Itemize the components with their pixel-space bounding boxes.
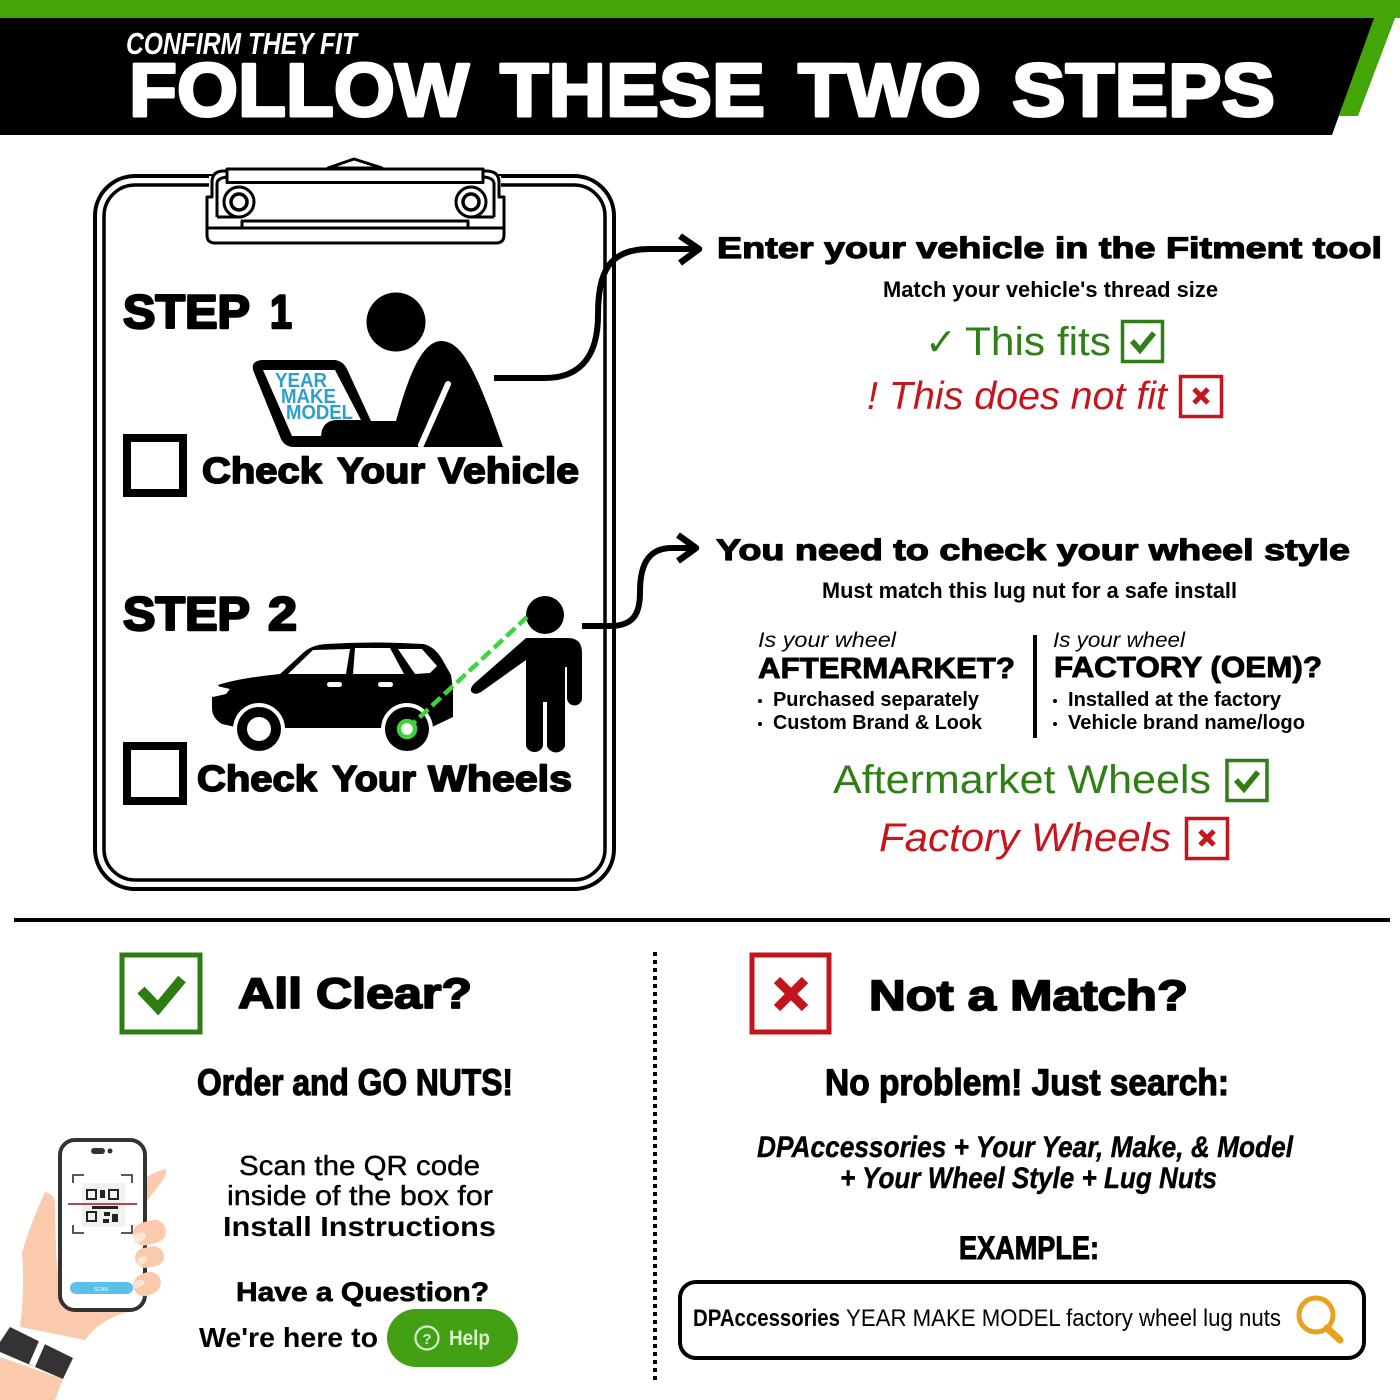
aftermarket wheels result: Aftermarket Wheels <box>833 758 1211 802</box>
icon: red x box <box>1186 818 1228 858</box>
main title <box>129 48 1275 132</box>
icon: large green check <box>122 955 200 1032</box>
icon: standing person <box>471 596 582 752</box>
arrow: step 1 to fitment tool <box>494 236 699 378</box>
search box: DPAccessories <box>693 1305 840 1332</box>
step 1 heading: STEP <box>123 285 250 338</box>
check your wheels label: Check <box>197 758 318 799</box>
aftermarket column <box>758 629 1015 734</box>
screen text: MODEL <box>286 402 353 424</box>
check your vehicle label: Check <box>202 450 323 491</box>
step 2 heading: 2 <box>268 587 297 640</box>
factory column: Vehicle brand name/logo <box>1068 711 1305 734</box>
help button <box>387 1309 518 1367</box>
example label: EXAMPLE: <box>959 1230 1099 1266</box>
order subheading: Order and GO NUTS! <box>197 1062 513 1103</box>
icon: green check box <box>1122 322 1162 362</box>
icon: hand holding phone <box>0 1140 168 1400</box>
column divider <box>1033 635 1037 738</box>
check your vehicle label: Vehicle <box>438 450 579 491</box>
scan instructions: Install Instructions <box>223 1211 496 1242</box>
header kicker: CONFIRM THEY FIT <box>126 26 359 61</box>
check your wheels label <box>197 758 572 799</box>
search box <box>680 1282 1364 1358</box>
check your vehicle label: Your <box>337 450 425 491</box>
checkbox step 2 <box>127 746 183 801</box>
checkbox step 1 <box>127 438 183 493</box>
panel: all clear <box>0 955 518 1400</box>
fitment heading: Enter your vehicle in the Fitment tool <box>717 232 1382 265</box>
search subheading: No problem! Just search: <box>825 1062 1229 1103</box>
icon: magnifier <box>1299 1298 1340 1340</box>
fits example: ✓ <box>925 322 957 364</box>
main title: THESE <box>500 48 765 132</box>
scan instructions: inside of the box for <box>227 1180 493 1211</box>
icon: clipboard clip <box>207 159 504 243</box>
search formula: + Your Wheel Style + Lug Nuts <box>840 1162 1217 1195</box>
aftermarket column: Is your wheel <box>758 629 897 652</box>
icon: large red x <box>752 955 829 1032</box>
main title: STEPS <box>1012 48 1275 132</box>
not a match heading: Not a Match? <box>869 972 1188 1020</box>
check your vehicle label <box>202 450 579 491</box>
header banner <box>0 0 1400 135</box>
question heading: Have a Question? <box>236 1277 489 1307</box>
main title: FOLLOW <box>129 48 469 132</box>
check your wheels label: Your <box>332 758 416 799</box>
panel: not a match <box>680 955 1364 1358</box>
green sight line <box>399 617 527 737</box>
icon: person at laptop <box>253 292 503 447</box>
main title: TWO <box>798 48 981 132</box>
aftermarket column: AFTERMARKET? <box>758 653 1015 685</box>
help button: Help <box>449 1327 490 1350</box>
aftermarket column: Custom Brand & Look <box>773 711 983 734</box>
icon: hand holding phone: SCAN <box>94 1287 108 1293</box>
icon: green check box <box>1227 760 1267 800</box>
fits example: This fits <box>965 320 1111 364</box>
step 2 heading: STEP <box>123 587 250 640</box>
icon: red x box <box>1180 376 1222 416</box>
factory column: Installed at the factory <box>1068 688 1282 711</box>
thread size note: Match your vehicle's thread size <box>883 277 1218 302</box>
arrow: step 2 to wheel style <box>582 535 696 626</box>
step 2 details <box>716 534 1350 860</box>
scan instructions <box>223 1150 496 1242</box>
lug nut note: Must match this lug nut for a safe install <box>822 578 1237 603</box>
step 1 details <box>717 232 1382 418</box>
wheel style heading: You need to check your wheel style <box>716 534 1350 567</box>
aftermarket column: Purchased separately <box>773 688 980 711</box>
factory column: FACTORY (OEM)? <box>1054 652 1322 684</box>
factory column: Is your wheel <box>1053 629 1186 652</box>
factory wheels result: Factory Wheels <box>879 816 1171 860</box>
step 1 heading: 1 <box>270 285 292 338</box>
factory column <box>1053 629 1322 734</box>
screen text: MAKE <box>281 386 336 408</box>
clipboard panel <box>95 159 614 889</box>
search box: YEAR MAKE MODEL factory wheel lug nuts <box>846 1305 1281 1332</box>
search formula: DPAccessories + Your Year, Make, & Model <box>757 1131 1294 1164</box>
check your wheels label: Wheels <box>428 758 572 799</box>
does not fit example: ! This does not fit <box>867 375 1169 418</box>
scan instructions: Scan the QR code <box>239 1150 480 1181</box>
search formula <box>757 1131 1294 1195</box>
screen text <box>275 370 353 424</box>
here to help label: We're here to <box>199 1322 378 1353</box>
screen text: YEAR <box>275 370 328 392</box>
all clear heading: All Clear? <box>238 970 472 1018</box>
icon: car <box>212 642 453 755</box>
help button: ? <box>422 1331 432 1348</box>
